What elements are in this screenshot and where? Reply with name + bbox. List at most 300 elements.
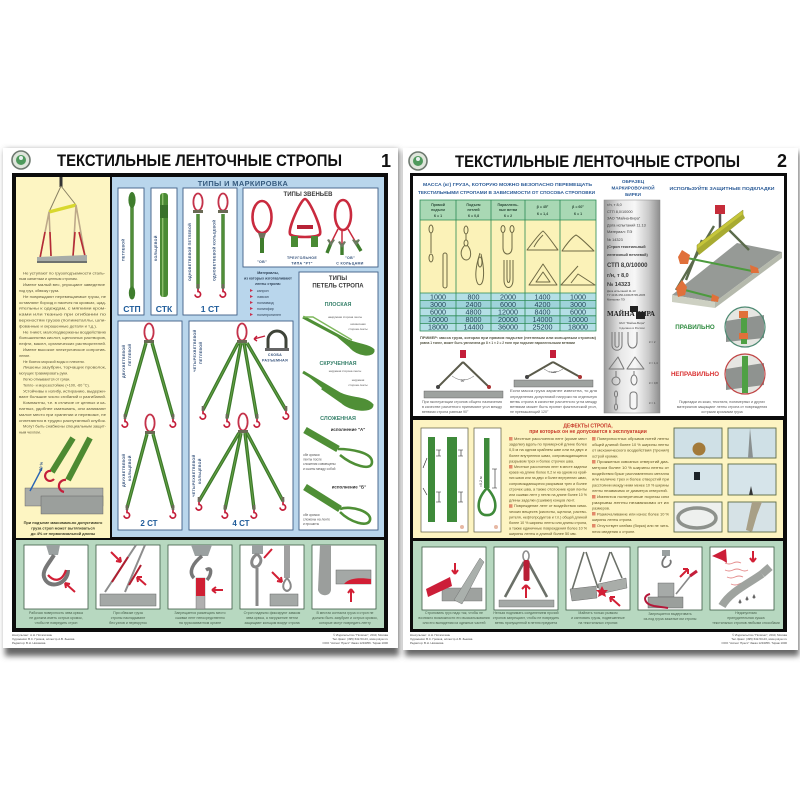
poster 2 [403, 148, 798, 650]
defects text column 1: более внутренних швах, сопровождающиеся [509, 454, 587, 458]
marking tag: г/н, т 8,0 [607, 273, 629, 279]
defects text column 2: расстоянии между ними менее 10 % ширины [592, 483, 669, 487]
defects text column 2: Размочаливание или износ более 10 % [597, 512, 670, 516]
defects text column 2: метром более 10 % ширины ленты от [592, 466, 669, 470]
defects text column 2: Прожженых сквозных отверстий диа- [597, 460, 670, 464]
shackle label: СКОБА [268, 353, 282, 357]
card: load with corners [566, 547, 630, 610]
marking tag: МАЙНА ВИРА [607, 310, 655, 318]
materials list: полиэфир [257, 307, 274, 311]
defect photos [674, 428, 776, 532]
defects text column 1: более 10 % ширины ленты или длины стропа, [509, 521, 587, 525]
table headers: ные ветви [499, 208, 517, 212]
card captions 1: должно быть зазубрин и острых кромок, [312, 616, 378, 620]
card captions 1: защищают кольцом вокруг стропа [244, 621, 300, 625]
sling 2 ST: ДВУХВЕТВЕВОЙ [122, 345, 126, 378]
loop: flat: начиночная [350, 322, 366, 326]
credits 2 left: Консультант: А.Н. Потапочкин [410, 633, 451, 637]
properties text: ятельны к одеждам, с мягкими кром- [19, 307, 107, 311]
credits 1 right [323, 633, 388, 645]
logo 1 [12, 151, 30, 169]
credits 1 right: © Издательство "Полиэкс", 2010, Москва [333, 633, 388, 637]
link labels: С КОЛЬЦАМИ [336, 262, 364, 266]
stretching note: При подъеме максимально допустимого [24, 520, 103, 525]
defects text column 1: рителя, нефтепродуктов и т.п.) общей длиной [509, 515, 587, 519]
icon: wrong pad [725, 354, 765, 394]
loop: folded: и сшиты между собой [303, 467, 336, 471]
sling 4 ST: ПЕТЛЕВОЙ [199, 342, 203, 364]
table numbers: 4200 [534, 300, 550, 309]
pad note [677, 400, 767, 414]
heading: loop types: ТИПЫ [329, 276, 347, 282]
loop: twisted: СКРУЧЕННАЯ [320, 361, 357, 367]
marking tag [604, 200, 660, 413]
defects text column 1: краев на длине более 0,2 м на одном из край- [509, 471, 588, 475]
table numbers: 2400 [466, 300, 482, 309]
card captions 1: стропы накладывают [111, 616, 146, 620]
materials list: из которых изготавливают [244, 276, 292, 280]
example note: равна 1 тонне, может быть увеличена до 8 × 1 × 2 = 2 тонн при подъеме параллельными ветвями [420, 341, 575, 345]
properties text: Не гниют, малоподвержены воздействию [23, 330, 106, 334]
defects text column 1: сопровождающиеся разрывом трех и более [509, 482, 587, 486]
table numbers: 20000 [498, 315, 518, 324]
illustration: load on pads [672, 205, 782, 308]
sheet shadows [5, 150, 799, 656]
pad note: материалов защищают ленты стропа от повреждения [677, 405, 767, 409]
card captions 1: не должна иметь острых кромок, [29, 616, 83, 620]
shackle label [262, 353, 288, 362]
defects text column 1: заделки) вдоль по примерной длине более [509, 443, 587, 447]
credits 1 left: Художники: В.С. Громов, иллюстр.А.В. Зыкова [12, 637, 75, 641]
table numbers: 800 [468, 292, 480, 302]
loop: version B: сложены на ленте [303, 518, 330, 522]
page number 1: 1 [381, 151, 391, 171]
table headers: петлей [467, 208, 480, 212]
angle note left: в качестве расчетного принимают угол между [422, 405, 502, 409]
link labels: ТИПА "РТ" [291, 262, 313, 266]
heading: defects: ДЕФЕКТЫ СТРОПА, [563, 424, 613, 430]
panel: load table and protective pads [413, 176, 784, 416]
load heading [418, 182, 596, 195]
example note: ПРИМЕР: масса груза, которая при прямом подъеме (петлевым или кольцевым стропом) [420, 336, 596, 340]
card: pad on edge [422, 547, 486, 610]
properties text: Имеют малый вес, упрощают заведение [23, 283, 105, 287]
loop types box [299, 272, 378, 530]
icon: correct pad [725, 307, 765, 347]
card captions 2: Строповать груз надо так, чтобы не [425, 611, 483, 615]
label: correct: ПРАВИЛЬНО [675, 324, 715, 331]
table numbers: 6000 [430, 308, 446, 316]
defects text column 1: 0,5 м на одном крайнем шве или на двух и [509, 448, 587, 452]
defects text column 1: Местные расслоения лент в месте заделки [514, 465, 587, 469]
card: sharp edges [312, 545, 376, 609]
properties text: ным чехлом. [19, 431, 41, 435]
angle note left: ветвями стропа равным 90° [422, 410, 469, 414]
heading: loop types: ПЕТЕЛЬ СТРОПА [312, 284, 364, 290]
table numbers: 1400 [534, 292, 550, 302]
card captions 1: которые могут повредить ленту [319, 621, 371, 625]
sling 2 ST: ДВУХВЕТВЕВОЙ [122, 454, 126, 487]
defects text column 2 [592, 437, 670, 534]
heading: types and marking: ТИПЫ И МАРКИРОВКА [198, 179, 289, 188]
marking tag: Дата испытаний 11.13 [607, 224, 646, 228]
table headers: К = 1 [434, 214, 442, 218]
properties text: большинства кислот, щелочных растворов, [19, 336, 106, 340]
marking tag: СТП 8,0/10000 [607, 263, 648, 269]
angle note left: При эксплуатации стропов общего назначения [422, 400, 502, 404]
defects text column 2: разрывы ленты независимо от их [592, 501, 669, 505]
defects text column 1: длины заделки (сшивки) концов лент. [509, 499, 575, 503]
table headers [431, 203, 584, 218]
load heading: ТЕКСТИЛЬНЫМИ СТРОПАМИ В ЗАВИСИМОСТИ ОТ СПОСОБА СТРОПОВКИ [418, 190, 596, 195]
marking tag: ТУ 4136-356-100025795-2005 [607, 293, 646, 297]
card captions 2: Запрещается выдергивать [648, 612, 692, 616]
defects text column 1: ческих веществ (кислоты, щелочи, раство- [509, 510, 588, 514]
loop: twisted: наружная сторона ленты [329, 369, 361, 373]
loop: version B [303, 484, 370, 526]
defects text column 2: размеров. [592, 507, 610, 511]
defect bullets [509, 437, 596, 528]
black frame [12, 173, 388, 632]
properties text: вают большие число сгибаний и разгибаний. [19, 395, 106, 399]
marking tag: СТП 8,0/10000 [607, 210, 633, 214]
loop: twisted: наружная [352, 378, 365, 382]
heading: marking tag: БИРКИ [625, 192, 641, 197]
angle note right: не превышающий 120° [510, 410, 549, 414]
properties text: натных, удобнее сматывать, они занимают [19, 407, 106, 411]
table headers: β = 60° [572, 205, 584, 209]
card captions 1: без узлов и перекруток [109, 621, 147, 625]
link labels: ТРЕУГОЛЬНОЕ [287, 256, 317, 260]
angle note right: ветвь стропа в качестве расчетного угла между [510, 400, 597, 404]
properties text: фованные и окрашенные детали и т.д.). [19, 324, 97, 328]
credits 1 left [12, 633, 75, 645]
marking tag: ленточный петлевой) [607, 253, 649, 257]
sling STP: СТП [123, 304, 141, 314]
sling STK [151, 188, 177, 315]
table numbers [428, 292, 588, 332]
defects text column 1 [509, 437, 588, 536]
loop: folded [303, 416, 372, 471]
table numbers: 6000 [570, 308, 586, 316]
properties text: оставляют борозд и насечек на кромках, щад- [19, 301, 107, 305]
properties text: Лишены зазубрин, торчащих проволок, [23, 366, 106, 370]
sling 2 ST: ПЕТЛЕВОЙ [128, 344, 132, 366]
card captions 1: Запрещается размещать место [174, 611, 226, 615]
sling STP: ПЕТЛЕВОЙ [122, 239, 126, 261]
defect diagram B: ≈0,2 м [479, 476, 483, 487]
properties text: верхностям грузов (полиметаллы, шли- [19, 318, 107, 322]
diagram: sling angle 120: < 120° [549, 370, 558, 374]
sling 4 ST: ЧЕТЫРЕХВЕТВЕВОЙ [192, 454, 196, 497]
table numbers: 3000 [430, 300, 446, 309]
table numbers: 2000 [500, 292, 516, 302]
table numbers: 18000 [568, 322, 588, 332]
card: sling on hook [168, 545, 232, 609]
card: hook edges [24, 545, 88, 609]
properties text: могущих травмировать руки. [19, 372, 68, 376]
credits 2 left: Редактор: В.Н. Новикова [410, 641, 444, 645]
materials list: лавсан [257, 295, 269, 299]
icon: sling stretching under load [25, 438, 103, 514]
properties text: ление. [19, 354, 30, 358]
credits 1 right: ООО "Аспект Пресс" Заказ 1234356. Тираж 1000 [323, 641, 388, 645]
table numbers: 1000 [570, 292, 586, 302]
properties text: Не повреждают перемещаемые грузы, не [23, 295, 106, 299]
sling STP [118, 188, 144, 315]
panel: properties [16, 177, 110, 538]
sling 1 ST [183, 188, 237, 315]
poster 2 sheet [403, 148, 798, 650]
loop: flat: сторона ленты [348, 327, 368, 331]
stretching note: груза строп может вытягиваться [31, 526, 95, 530]
properties text: ным канатным и цепным стропам. [19, 277, 78, 281]
angle note right: определения допустимой нагрузки на отдельную [510, 395, 597, 399]
logo 2 [409, 152, 427, 170]
card captions 2: возникло возможности его выскальзывания [418, 616, 490, 620]
card captions 2 [418, 611, 780, 625]
properties text: сплетаются в трудно распутанный клубок. [19, 419, 106, 423]
sling 1 ST: 1 СТ [201, 304, 220, 314]
table headers: К = 1,4 [537, 212, 548, 216]
loop: folded: СЛОЖЕННАЯ [320, 416, 356, 422]
loop: version B: исполнение "Б" [332, 484, 366, 490]
marking tag: К = 1 [649, 401, 656, 405]
card captions 2: Нельзя поднимать соединением прочий [493, 611, 559, 615]
diagram: sling angle 90: 90° [461, 379, 466, 383]
credits 2 left [410, 633, 473, 645]
sling 4 ST: 4 СТ [232, 519, 250, 528]
pad note: острыми кромками груза [701, 410, 743, 414]
table numbers: 14400 [464, 322, 484, 332]
defects text column 2: общей длиной более 10 % ширины ленты [592, 443, 669, 447]
properties text: Не уступают по грузоподъемности сталь- [23, 271, 106, 275]
angle note left [422, 400, 502, 414]
load table [420, 200, 596, 332]
table numbers: 36000 [498, 322, 518, 332]
defects text column 2: ются сведения о стропе. [592, 530, 635, 534]
defects text column 1: них швов или на двух и более внутренних швах, [509, 476, 587, 480]
defects text column 1: разрывом трех и более строчек шва. [509, 459, 574, 463]
link types box [243, 188, 378, 267]
card captions 1 [29, 611, 378, 625]
heading: marking tag: ОБРАЗЕЦ [622, 179, 645, 184]
properties text: Устойчивы к изгибу, истиранию, выдержи- [23, 389, 107, 393]
properties text: Тепло- и морозостойкие (+100, -60 °С). [23, 383, 90, 387]
poster 1 [3, 148, 398, 648]
marking tag: Сделано в России [619, 326, 645, 330]
materials list: полипропилен [257, 313, 281, 317]
stretching note [24, 520, 103, 536]
properties text: Могут быть снабжены специальным защит- [23, 425, 107, 429]
heading: marking tag [611, 179, 655, 197]
icon: load on yoke [37, 177, 87, 263]
properties text [19, 271, 107, 435]
shackle label: РАЗЪЕМНАЯ [262, 358, 288, 362]
sling 4 ST: КОЛЬЦЕВОЙ [198, 458, 202, 484]
card captions 2: и кантовать грузы, подвешенные [571, 616, 625, 620]
panel: types and marking [112, 177, 384, 537]
defects text column 1: ширины ленты и длиной более 50 мм. [509, 532, 577, 536]
table numbers: 14000 [532, 315, 552, 324]
card captions 1: чтобы не повредить строп [35, 621, 77, 625]
credits 2 left: Художники: В.С. Громов, иллюстр.А.В. Зыкова [410, 637, 473, 641]
marking tag: Материал ПЭ [607, 298, 625, 302]
table numbers: 4800 [466, 308, 482, 316]
credits 1 right: Тел./факс: (495) 642-53-23, www.polyex.ru [332, 637, 388, 641]
panel: do-not rules 1 [16, 540, 384, 628]
defects text column 2: острой кромки. [592, 454, 618, 458]
properties text: малое место при хранении и перевозке, не [19, 413, 106, 417]
sling STK: КОЛЬЦЕВОЙ [154, 235, 158, 261]
panel: defects [413, 420, 783, 538]
materials list: Материалы, [257, 271, 279, 275]
heading: loop types [312, 276, 364, 290]
defects text column 2: Отсутствует клеймо (бирка) или не чита- [597, 524, 670, 528]
defects text column 1: Местные расслоения лент (кроме мест [514, 437, 587, 441]
loop: folded: ленты после [303, 458, 322, 462]
defects text column 2: ленты независимо от диаметра отверстий. [592, 489, 668, 493]
card captions 2: на текстильных стропах [578, 621, 618, 625]
table headers: Подъем [466, 203, 481, 207]
table numbers: 3000 [570, 300, 586, 309]
label: wrong: НЕПРАВИЛЬНО [671, 371, 719, 378]
card captions 2: принудительная сушка [727, 616, 765, 620]
sling STK: СТК [156, 304, 173, 314]
marking tag: ЗАО "Майна-Вира" [619, 321, 645, 325]
diagram: sling angle 120 [514, 350, 593, 387]
marking tag: № 14323 [607, 238, 623, 242]
table icons [429, 225, 595, 288]
page number 2: 2 [777, 151, 787, 171]
angle note right: ветвями может быть принят фактический угол, [510, 405, 597, 409]
sling 2 ST: КОЛЬЦЕВОЙ [128, 455, 132, 481]
defects text column 1: Повреждение лент от воздействия хими- [514, 504, 588, 508]
card captions 2: текстильных стропов любыми способами [712, 621, 780, 625]
sling 4 ST [189, 321, 293, 530]
poster 1 sheet [3, 148, 398, 648]
credits 2 right [722, 633, 787, 645]
defects text column 2: Имеются поперечные порезы или [597, 495, 669, 499]
table numbers: 18000 [428, 322, 448, 332]
properties text: Компактны, т.е. в отличие от цепных и ка- [23, 401, 107, 405]
loop: folded: исполнение "А" [331, 427, 365, 432]
table headers: К = 0,8 [468, 214, 479, 218]
loop: flat: ПЛОСКАЯ [325, 302, 352, 308]
table numbers: 10000 [568, 315, 588, 324]
diagram: sling angle 90 [424, 350, 503, 398]
card: chemicals [710, 547, 774, 610]
marking tag: ЗАО "Майна-Вира" [607, 216, 641, 220]
defects text column 2: ширины ленты стропа. [592, 518, 632, 522]
card captions 1: В местах контакта груза и строп не [316, 611, 374, 615]
card captions 1: Строп надежно фиксируют замком [244, 611, 301, 615]
card captions 2: Майнить только рывком [578, 611, 618, 615]
title 2: ТЕКСТИЛЬНЫЕ ЛЕНТОЧНЫЕ СТРОПЫ [455, 153, 740, 171]
title 1: ТЕКСТИЛЬНЫЕ ЛЕНТОЧНЫЕ СТРОПЫ [57, 152, 342, 170]
marking tag: г/н, т 8,0 [607, 203, 622, 207]
marking tag: К = 2 [649, 340, 656, 344]
icon: triangle link [290, 199, 320, 247]
heading: link types: ТИПЫ ЗВЕНЬЕВ [284, 192, 333, 198]
table headers: К = 1 [574, 212, 582, 216]
stretching note: до 4% от первоначальной длины [31, 531, 96, 536]
marking tag: № 14323 [607, 282, 630, 288]
properties text: Имеют высокое электрическое сопротив- [23, 348, 107, 352]
loop: flat: нанружная сторона ленты [328, 315, 362, 319]
card: splice position [494, 547, 558, 610]
defects text column 1: или сшивки лент у петли на длине более 10 % [509, 493, 588, 497]
card captions 2: ветвь пропущенной в петлю предмета [495, 621, 557, 625]
defect diagram B [474, 428, 501, 532]
table headers: Параллель- [498, 203, 519, 207]
sling 1 ST: ОДНОВЕТВЕВОЙ ПЕТЛЕВОЙ [188, 223, 192, 281]
loop: version B: и прошиты [303, 522, 320, 526]
heading: defects [529, 424, 647, 435]
table headers: Прямой [431, 203, 445, 207]
heading: defects: при которых он не допускается к эксплуатации [529, 429, 647, 435]
credits 1 left: Редактор: В.Н. Новикова [12, 641, 46, 645]
icon: sling stretching under load: 20 % [38, 461, 44, 471]
marking tag: К = 1,4 [649, 361, 658, 365]
sling 4 ST: ЧЕТЫРЕХВЕТВЕВОЙ [193, 329, 197, 372]
heading: protective pads: ИСПОЛЬЗУЙТЕ ЗАЩИТНЫЕ ПОДКЛАДКИ [670, 184, 775, 192]
marking tag: К = 0,8 [649, 381, 658, 385]
black frame 2 [410, 173, 787, 632]
pad note: Подкладки из кожи, текстиля, полимерных и других [679, 400, 765, 404]
table numbers: 12000 [498, 308, 518, 316]
marking tag: Материал: ПЭ [607, 230, 632, 234]
defects text column 1: строчек шва, а также отслоение края ленты [509, 487, 587, 491]
table numbers: 6000 [500, 300, 516, 309]
angle note right: Если масса груза заранее известна, то для [510, 389, 597, 393]
loop: folded: обе кромки [303, 453, 320, 457]
sling 2 ST: 2 СТ [140, 519, 158, 528]
card captions 1: на грузозахватном органе [179, 621, 221, 625]
table numbers: 10000 [428, 315, 448, 324]
loop: version B: обе кромки [303, 513, 320, 517]
materials list: полиамид [257, 301, 274, 305]
arrow to shackle [254, 336, 265, 341]
link labels [257, 256, 364, 266]
materials list: капрон [257, 289, 269, 293]
card: pull out sling [638, 547, 702, 610]
credits 2 right: Тел./факс: (495) 642-53-23, www.polyex.ru [731, 637, 787, 641]
defects text column 2: Поверхностных обрывов нитей ленты [597, 437, 669, 441]
loop: twisted: сторона ленты [348, 383, 368, 387]
table headers: К = 2 [504, 214, 512, 218]
materials list: ленты стропа: [255, 282, 281, 286]
sling 1 ST: ОДНОВЕТВЕВОЙ КОЛЬЦЕВОЙ [212, 220, 216, 281]
icon: oval link [252, 201, 272, 253]
marking tag: Дата испытаний 11.13 [607, 289, 636, 293]
card captions 1: Рабочая поверхность зева крюка [29, 611, 83, 615]
card: slinging angle [96, 545, 160, 609]
card captions 2: или его выпадения из одежных частей [423, 621, 485, 625]
table numbers: 8000 [466, 315, 482, 324]
card captions 2: из-под груза зажатые им стропы [644, 617, 697, 621]
defects text column 2: от механического воздействия (трения) [592, 449, 670, 453]
load heading: МАССА (кг) ГРУЗА, КОТОРУЮ МОЖНО БЕЗОПАСНО ПЕРЕМЕЩАТЬ [423, 182, 593, 187]
icon: oval link with rings [327, 200, 361, 255]
card captions 2: Недопустимо [735, 611, 757, 615]
credits 2 right: ООО "Аспект Пресс" Заказ 1234356. Тираж 1000 [722, 641, 787, 645]
panel: do-not rules 2 [413, 541, 783, 629]
marking tag: (Строп текстильный [607, 245, 646, 249]
card captions 2: стропов запрещают, чтобы не повредить [493, 616, 559, 620]
card captions 1: зева крюка, а нагружение петли [246, 616, 298, 620]
credits 2 right: © Издательство "Полиэкс", 2010, Москва [732, 633, 787, 637]
